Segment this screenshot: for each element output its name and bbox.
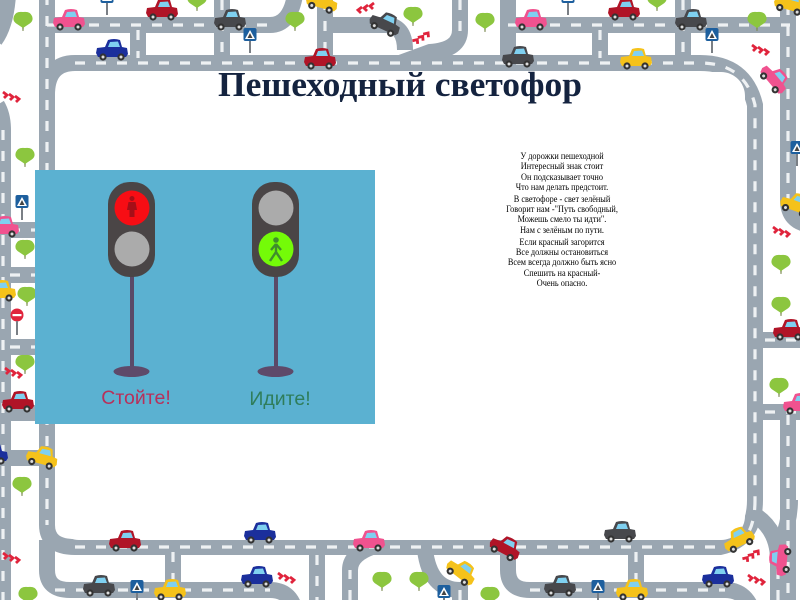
poem text: Говорит нам -"Путь свободный, xyxy=(506,204,618,214)
label: stop: Стойте! xyxy=(101,387,171,409)
poem text: Можешь смело ты идти". xyxy=(518,214,606,224)
panel: traffic light picture xyxy=(35,170,375,424)
traffic light: stop xyxy=(108,182,155,377)
title: Пешеходный светофор xyxy=(218,65,582,104)
poem text: Всем всегда должно быть ясно xyxy=(508,257,616,267)
panel: white content area xyxy=(55,72,745,540)
poem text: Он подсказывает точно xyxy=(521,172,603,182)
poem text xyxy=(506,151,618,288)
traffic light: go xyxy=(252,182,299,377)
poem text: Все должны остановиться xyxy=(516,247,608,257)
poem text: У дорожки пешеходной xyxy=(520,151,604,161)
poem text: Что нам делать предстоит. xyxy=(516,182,608,192)
poem text: Нам с зелёным по пути. xyxy=(520,225,604,235)
poem text: Очень опасно. xyxy=(537,278,587,288)
poem text: Спешить на красный- xyxy=(524,268,600,278)
poem text: В светофоре - свет зелёный xyxy=(514,194,611,204)
poem text: Интересный знак стоит xyxy=(521,161,603,171)
label: go: Идите! xyxy=(249,388,311,410)
poem text: Если красный загорится xyxy=(519,237,605,247)
